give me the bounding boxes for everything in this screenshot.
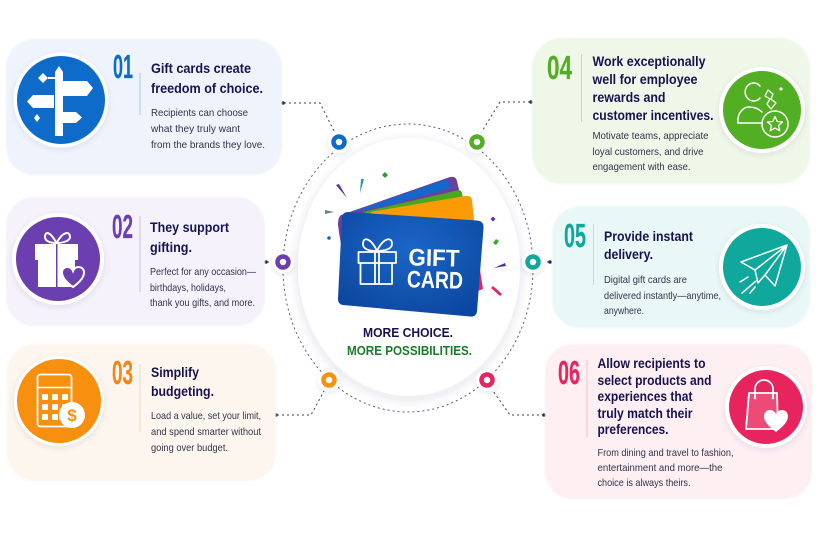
heading 04: Work exceptionally	[592, 54, 706, 69]
panel background 06	[545, 344, 812, 499]
heading 01: Gift cards create	[151, 61, 251, 76]
icon: signpost	[14, 52, 108, 148]
connector: 05	[542, 260, 552, 264]
node: green	[466, 131, 488, 153]
body text 04: engagement with ease.	[592, 162, 690, 173]
panel: 06 preferences	[545, 344, 812, 499]
tagline	[347, 325, 472, 358]
body text 05: delivered instantly—anytime,	[604, 291, 721, 302]
panel background 03	[7, 344, 276, 481]
icon: calculator: $	[67, 406, 77, 425]
body text 06: choice is always theirs.	[598, 478, 690, 489]
body text 05: Digital gift cards are	[604, 275, 687, 286]
heading 05: delivery.	[604, 247, 653, 262]
panel background 04	[532, 38, 810, 184]
icon: calculator	[14, 356, 104, 446]
number 05: 05	[564, 217, 586, 254]
node: blue	[328, 131, 350, 153]
icon: gift outline	[358, 239, 396, 284]
heading 02: gifting.	[150, 240, 192, 255]
number 06: 06	[558, 354, 580, 391]
panel background 01	[6, 39, 282, 175]
connector: 04	[481, 100, 533, 133]
number 04: 04	[547, 49, 572, 86]
confetti sparkles	[325, 172, 506, 296]
heading 01: freedom of choice.	[151, 81, 263, 96]
card text: CARD	[407, 266, 463, 295]
body text 02: birthdays, holidays,	[150, 283, 226, 294]
heading 06: select products and	[598, 373, 712, 388]
icon: gift with heart	[12, 213, 104, 305]
icon: paper plane	[719, 224, 805, 310]
connector: 01	[281, 101, 335, 133]
node: orange	[318, 369, 340, 391]
tagline: MORE POSSIBILITIES.	[347, 343, 472, 358]
number 03: 03	[112, 354, 133, 391]
card: orange back	[370, 196, 475, 230]
panel: 02 gifting	[6, 197, 265, 326]
panel: 03 budgeting	[7, 344, 276, 481]
body text 06: From dining and travel to fashion,	[598, 448, 734, 459]
body text 01: from the brands they love.	[151, 140, 265, 151]
node: pink	[476, 369, 498, 391]
body text 03: and spend smarter without	[151, 427, 261, 438]
heading 06: experiences that	[598, 389, 693, 404]
body text 04: loyal customers, and drive	[592, 147, 704, 158]
gift card stack	[338, 177, 484, 317]
panel: 04 employee rewards	[532, 38, 810, 184]
panel: 05 instant delivery	[552, 206, 810, 328]
card: blue front	[338, 212, 484, 317]
body text 04: Motivate teams, appreciate	[592, 131, 709, 142]
heading 04: well for employee	[592, 72, 698, 87]
heading 03: Simplify	[151, 365, 199, 380]
connector: 02	[264, 260, 274, 264]
body text 02: thank you gifts, and more.	[150, 298, 255, 309]
heading 04: rewards and	[592, 90, 666, 105]
card: green back	[363, 190, 463, 218]
panel background 05	[552, 206, 810, 328]
connector: 03	[274, 391, 324, 417]
node: purple	[272, 251, 294, 273]
card: pink back	[475, 270, 483, 292]
body text 02: Perfect for any occasion—	[150, 267, 257, 278]
connector: 06	[493, 391, 546, 417]
heading 04: customer incentives.	[592, 108, 714, 123]
number 02: 02	[112, 208, 133, 245]
body text 05: anywhere.	[604, 306, 644, 317]
heading 06: truly match their	[598, 406, 693, 421]
heading 05: Provide instant	[604, 229, 693, 244]
body text 03: Load a value, set your limit,	[151, 411, 261, 422]
card text: GIFT	[408, 244, 460, 273]
heading 02: They support	[150, 220, 229, 235]
number 01: 01	[113, 48, 133, 85]
heading 06: preferences.	[598, 422, 668, 437]
card: purple back	[338, 177, 470, 270]
heading 03: budgeting.	[151, 384, 214, 399]
centre circle	[298, 138, 520, 396]
central dotted orbit	[283, 124, 533, 412]
node: teal	[522, 251, 544, 273]
tagline: MORE CHOICE.	[363, 325, 453, 340]
heading 06: Allow recipients to	[598, 356, 706, 371]
body text 06: entertainment and more—the	[598, 463, 723, 474]
icon: shopping bag with heart	[725, 366, 807, 448]
body text 01: Recipients can choose	[151, 108, 248, 119]
body text 03: going over budget.	[151, 443, 228, 454]
card: blue back	[352, 179, 450, 212]
icon: person with star	[719, 67, 805, 153]
panel: 01 freedom of choice	[6, 39, 282, 175]
body text 01: what they truly want	[150, 124, 240, 135]
panel background 02	[6, 197, 265, 326]
